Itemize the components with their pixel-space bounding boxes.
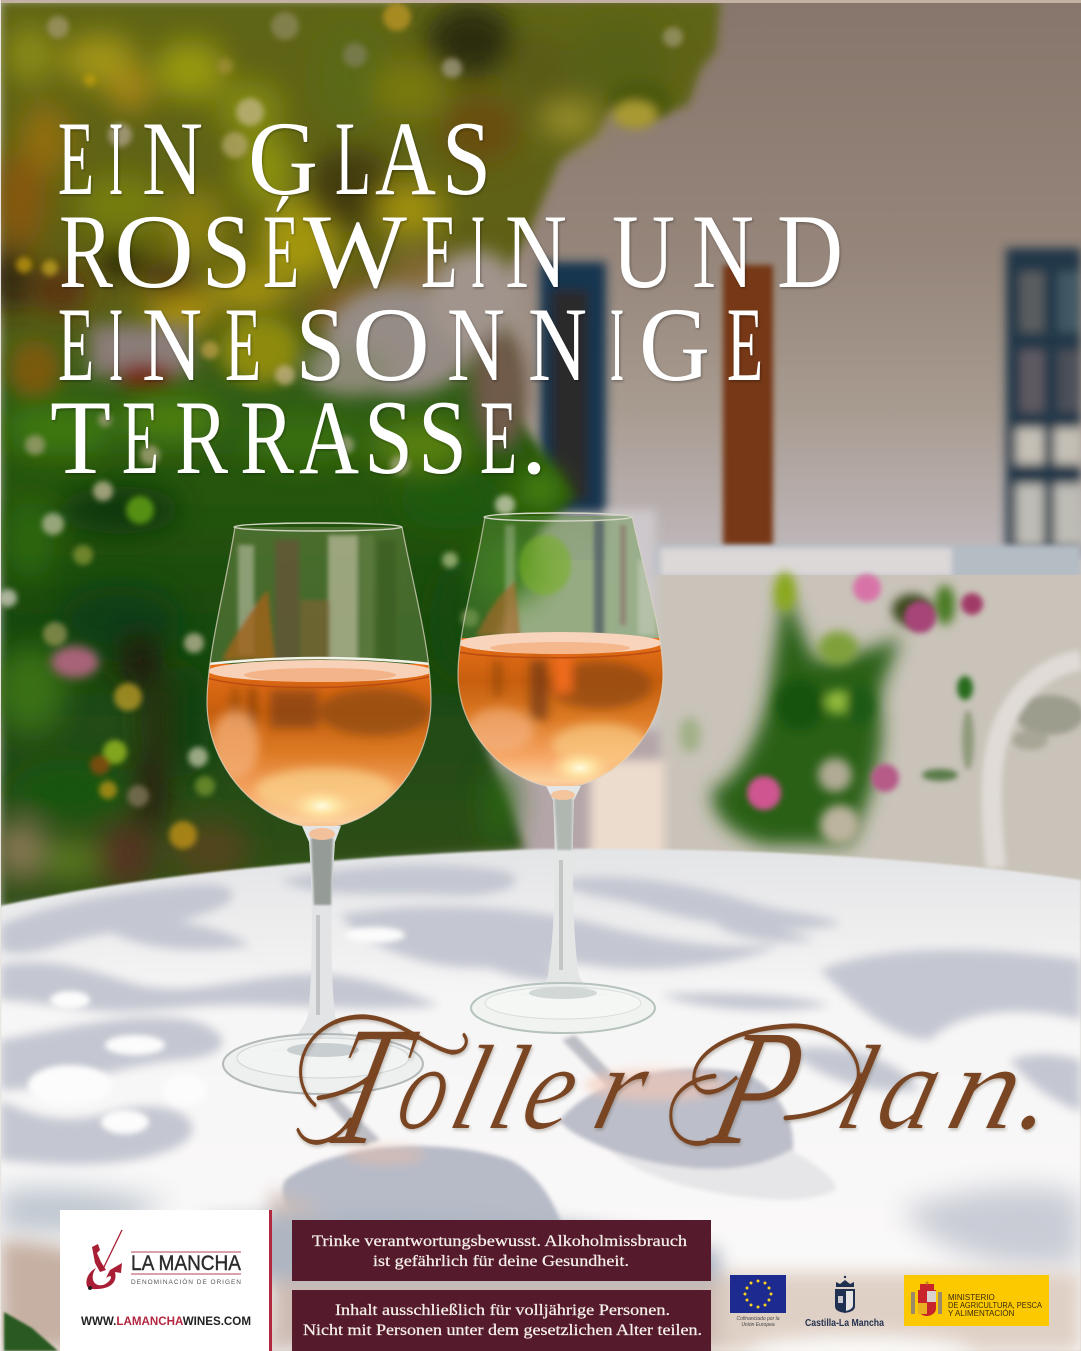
logo: European Union: Cofinanciado por la <box>736 1316 780 1322</box>
title: A <box>299 379 359 496</box>
foliage mass <box>0 0 720 910</box>
title: G <box>639 286 710 403</box>
title: L <box>335 100 371 217</box>
lower foliage colours <box>0 396 562 887</box>
title: E <box>225 286 261 403</box>
script slogan: T <box>309 992 432 1180</box>
title: S <box>296 286 345 403</box>
script slogan: r <box>581 1022 663 1155</box>
title: S <box>418 379 467 496</box>
title: E <box>122 379 159 496</box>
title: G <box>248 100 318 217</box>
script slogan <box>298 992 1080 1180</box>
script slogan: a <box>865 1022 957 1155</box>
title: R <box>175 379 228 496</box>
leaf star highlight <box>608 78 672 129</box>
title: E <box>480 379 517 496</box>
blue window <box>540 262 606 512</box>
wine glass: left <box>200 522 440 1094</box>
title: E <box>421 193 457 310</box>
script slogan: o <box>385 1022 467 1155</box>
title: R <box>240 379 294 496</box>
glass shadows <box>282 1035 836 1260</box>
logo: European Union: Unión Europea <box>741 1322 775 1328</box>
script slogan: P <box>694 997 821 1179</box>
logo: Spanish ministry: MINISTERIO <box>948 1293 995 1302</box>
title: S <box>202 193 251 310</box>
brown door <box>723 265 773 548</box>
website: WWW.LAMANCHAWINES.COM <box>81 1316 251 1328</box>
light patches on table <box>28 927 405 1134</box>
title: T <box>50 379 111 496</box>
brand name <box>131 1251 241 1286</box>
bokeh highlights <box>0 3 683 849</box>
house wall <box>400 0 1081 560</box>
title: D <box>777 193 843 310</box>
title: N <box>692 193 754 310</box>
title: N <box>447 286 505 403</box>
terrace ledge and lower wall <box>400 510 1081 885</box>
white chair <box>992 660 1081 868</box>
title: I <box>610 286 624 403</box>
logo: European Union <box>730 1275 786 1328</box>
footer logo panel <box>60 1210 272 1351</box>
leaf shadows on table <box>0 865 1081 1267</box>
right window <box>1006 248 1081 553</box>
script slogan: l <box>476 1022 542 1155</box>
stem <box>510 786 615 996</box>
pink blur in foliage <box>51 646 99 678</box>
title: N <box>505 193 567 310</box>
script slogan: . <box>1007 1022 1073 1155</box>
notice: adults only: Inhalt ausschließlich für volljährige Personen. <box>335 1302 670 1319</box>
table top <box>0 849 1081 1351</box>
logo: Castilla-La Mancha: Castilla-La Mancha <box>805 1318 884 1329</box>
mid foliage band <box>9 250 528 450</box>
title: I <box>471 193 485 310</box>
title: W <box>303 193 407 310</box>
notice: adults only: Nicht mit Personen unter dem gesetzlichen Alter teilen. <box>303 1322 702 1339</box>
title: O <box>352 286 430 403</box>
flourish: capital swashes <box>298 1017 858 1143</box>
title: S <box>364 379 413 496</box>
script slogan: l <box>438 1022 504 1155</box>
logo: Spanish ministry: Y ALIMENTACIÓN <box>948 1309 1015 1318</box>
title: S <box>442 100 491 217</box>
title: A <box>375 100 436 217</box>
title: U <box>612 193 675 310</box>
stem <box>270 826 375 1052</box>
title <box>50 100 843 496</box>
brand name: DENOMINACIÓN DE ORIGEN <box>131 1277 241 1286</box>
title: I <box>109 286 123 403</box>
title: E <box>727 286 763 403</box>
table bottom edge <box>0 1190 1081 1351</box>
right flowering bush <box>679 572 983 845</box>
title: R <box>59 193 113 310</box>
notice: responsible drinking: ist gefährlich für deine Gesundheit. <box>373 1253 629 1270</box>
title: É <box>263 193 299 310</box>
title: N <box>528 286 587 403</box>
foot <box>223 1034 423 1094</box>
title: O <box>114 193 194 310</box>
logo: Castilla-La Mancha <box>805 1276 884 1329</box>
notice: responsible drinking <box>292 1220 711 1281</box>
script slogan: n <box>935 1022 1039 1155</box>
title: N <box>142 286 202 403</box>
logo: Spanish ministry: DE AGRICULTURA, PESCA <box>948 1301 1043 1310</box>
wine glass: right <box>450 510 670 1033</box>
title: E <box>58 100 94 217</box>
upper foliage colours <box>0 4 670 340</box>
title: N <box>142 100 203 217</box>
script slogan: l <box>825 1022 891 1155</box>
foot <box>471 983 655 1033</box>
title: I <box>109 100 123 217</box>
top edge <box>0 0 1081 3</box>
icon: coat of arms <box>911 1282 942 1316</box>
brand name: LA MANCHA <box>131 1252 241 1275</box>
script slogan: e <box>510 1022 594 1155</box>
icon: knight on horse <box>86 1230 122 1290</box>
logo: Spanish ministry <box>904 1275 1049 1326</box>
title: . <box>521 379 547 496</box>
title: E <box>58 286 94 403</box>
notice: responsible drinking: Trinke verantwortungsbewusst. Alkoholmissbrauch <box>312 1233 687 1250</box>
notice: adults only <box>292 1290 711 1351</box>
